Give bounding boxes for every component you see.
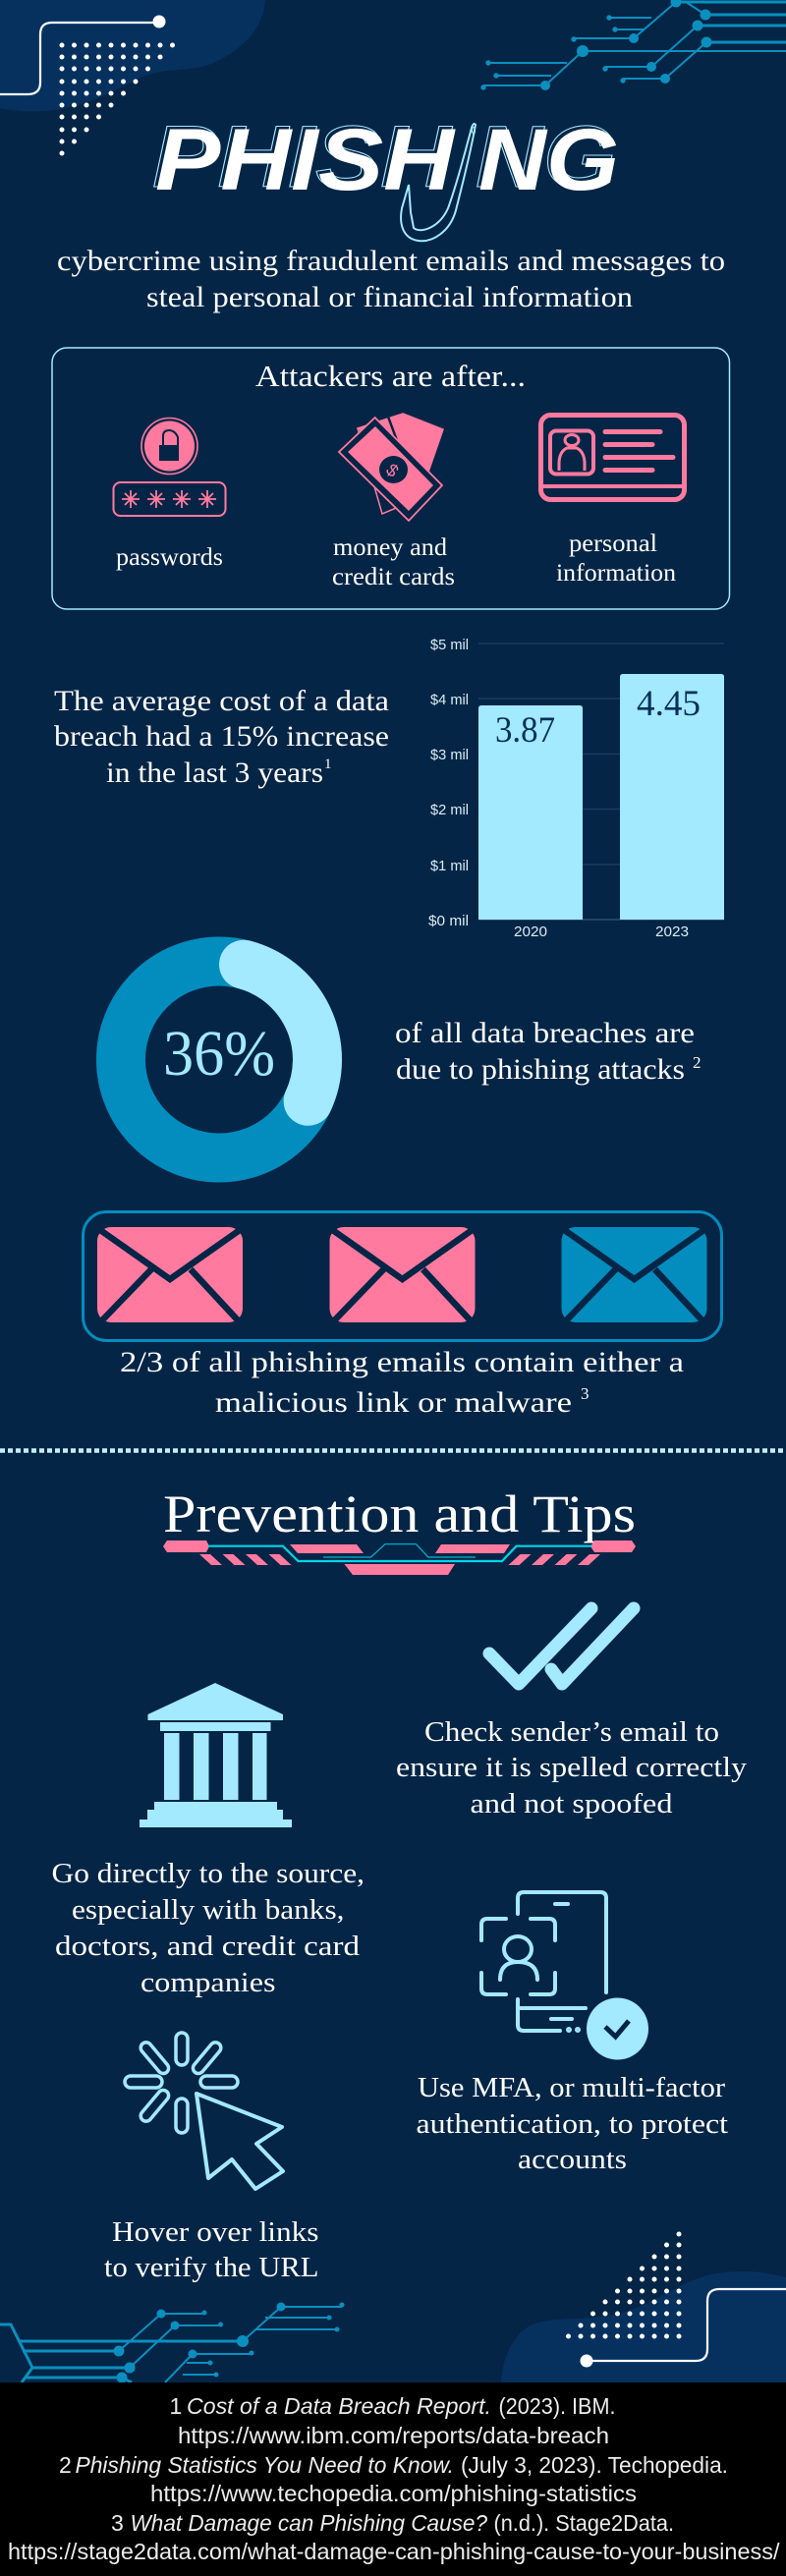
label: passwords: passwords (116, 544, 223, 571)
icon: pink envelope 2 (330, 1227, 476, 1322)
footer: references (0, 2382, 786, 2576)
reference 2: https://www.techopedia.com/phishing-statistics (150, 2481, 637, 2506)
icon: fish hook (401, 124, 476, 241)
donut chart: 36%: 36% (163, 1018, 275, 1090)
text: go directly to the source: Go directly to the source, (51, 1858, 365, 1889)
icon: bank (140, 1683, 292, 1827)
text: average cost of a data breach: The average cost of a data (54, 685, 389, 717)
icon: blue envelope (562, 1227, 707, 1322)
label: personal information: information (556, 560, 677, 587)
text: two thirds of phishing emails: 3 (581, 1384, 590, 1403)
text: two thirds of phishing emails: malicious link or malware (215, 1386, 572, 1419)
title: PHISHING with fish hook: NG (476, 107, 616, 205)
title: PHISHING with fish hook (152, 107, 619, 241)
text: two thirds of phishing emails: 2/3 of all phishing emails contain either a (120, 1346, 684, 1378)
text: hover over links: to verify the URL (104, 2252, 318, 2283)
reference 2: Phishing Statistics You Need to Know. (75, 2452, 454, 2478)
text: average cost of a data breach: breach had a 15% increase (54, 720, 389, 753)
label: personal information: personal (569, 531, 657, 557)
reference 2: 2 (59, 2452, 72, 2478)
axis labels: 2023 (655, 924, 689, 940)
label: money and credit cards (332, 534, 455, 590)
text: average cost of a data breach: in the last 3 years (106, 756, 323, 789)
icon: password lock (114, 419, 226, 516)
text: use MFA: accounts (518, 2144, 627, 2175)
axis labels: $5 mil (430, 637, 469, 653)
label: money and credit cards: credit cards (332, 564, 455, 590)
text: check sender's email (396, 1716, 748, 1820)
panel: email icons (83, 1212, 721, 1340)
reference 3: https://stage2data.com/what-damage-can-phishing-cause-to-your-business/ (8, 2539, 780, 2564)
text: data breaches due to phishing (395, 1017, 702, 1086)
subtitle: steal personal or financial information (146, 281, 633, 313)
text: average cost of a data breach: 1 (324, 756, 332, 772)
heading: prevention and tips: Prevention and Tips (163, 1484, 636, 1543)
icon: money: $ (382, 460, 403, 481)
axis labels: $1 mil (430, 858, 469, 874)
text: check sender's email: Check sender’s email to (424, 1716, 719, 1748)
icon: double check (489, 1608, 634, 1684)
text: go directly to the source: companies (140, 1967, 275, 1998)
bar: 2023 (620, 674, 724, 920)
decoration: top-left blob, line and dots (0, 0, 265, 153)
axis labels: $0 mil (428, 913, 469, 929)
text: check sender's email: and not spoofed (470, 1788, 673, 1820)
subtitle: cybercrime using fraudulent emails and messages to (57, 245, 725, 277)
decoration: heading ornament (163, 1540, 636, 1575)
text: hover over links: Hover over links (112, 2216, 318, 2248)
bar: 2020 (478, 705, 583, 920)
reference 1: 1 (169, 2393, 182, 2419)
text: data breaches due to phishing: of all data breaches are (395, 1017, 695, 1049)
text: data breaches due to phishing: 2 (693, 1053, 702, 1072)
reference 1: https://www.ibm.com/reports/data-breach (178, 2423, 609, 2448)
axis labels: $3 mil (430, 747, 469, 763)
label: money and credit cards: money and (333, 534, 448, 561)
text: hover over links (104, 2216, 318, 2283)
axis labels (428, 637, 689, 940)
text: check sender's email: ensure it is spelled correctly (396, 1752, 748, 1783)
icon: pink envelope 1 (97, 1227, 243, 1322)
reference 3: (n.d.). Stage2Data. (493, 2510, 674, 2536)
icon: money (339, 414, 443, 521)
decoration: bottom-right blob, line and dots (501, 2234, 786, 2382)
text: use MFA (417, 2072, 728, 2175)
bar chart: cost of data breach (428, 637, 724, 940)
icon: multi-factor phone (481, 1892, 648, 2059)
title: PHISHING with fish hook: PHISH (155, 110, 456, 208)
icon: id card (540, 415, 685, 499)
text: go directly to the source: doctors, and credit card (55, 1931, 361, 1962)
axis labels: $2 mil (430, 802, 469, 818)
reference 1: (2023). IBM. (499, 2393, 615, 2419)
reference 3: 3 (111, 2510, 124, 2536)
label: personal information (556, 531, 677, 587)
text: go directly to the source (51, 1858, 365, 1998)
decoration: top-right circuit (480, 0, 786, 90)
reference 2: (July 3, 2023). Techopedia. (461, 2452, 728, 2478)
text: go directly to the source: especially with banks, (72, 1894, 344, 1926)
text: average cost of a data breach (54, 685, 389, 789)
bar: 2020: 3.87 (495, 710, 555, 751)
reference 3 (8, 2510, 780, 2564)
text: use MFA: authentication, to protect (417, 2108, 728, 2140)
panel: attackers are after (52, 348, 729, 609)
text: use MFA: Use MFA, or multi-factor (418, 2072, 725, 2103)
subtitle (57, 245, 725, 313)
donut chart: 36% (121, 961, 317, 1157)
axis labels: 2020 (514, 924, 547, 940)
bar: 2023: 4.45 (637, 684, 701, 724)
icon: cursor click (125, 2033, 283, 2189)
reference 1 (169, 2393, 615, 2448)
text: data breaches due to phishing: due to phishing attacks (396, 1053, 685, 1086)
title: PHISHING with fish hook: NG (478, 110, 619, 208)
reference 3: What Damage can Phishing Cause? (130, 2510, 487, 2536)
title: PHISHING with fish hook: PHISH (152, 107, 453, 205)
reference 2 (59, 2452, 728, 2506)
reference 1: Cost of a Data Breach Report. (187, 2393, 491, 2419)
heading: Attackers are after... (255, 359, 526, 393)
decoration: bottom-left circuit (0, 2303, 344, 2383)
axis labels: $4 mil (430, 692, 469, 708)
text: two thirds of phishing emails (120, 1346, 684, 1419)
